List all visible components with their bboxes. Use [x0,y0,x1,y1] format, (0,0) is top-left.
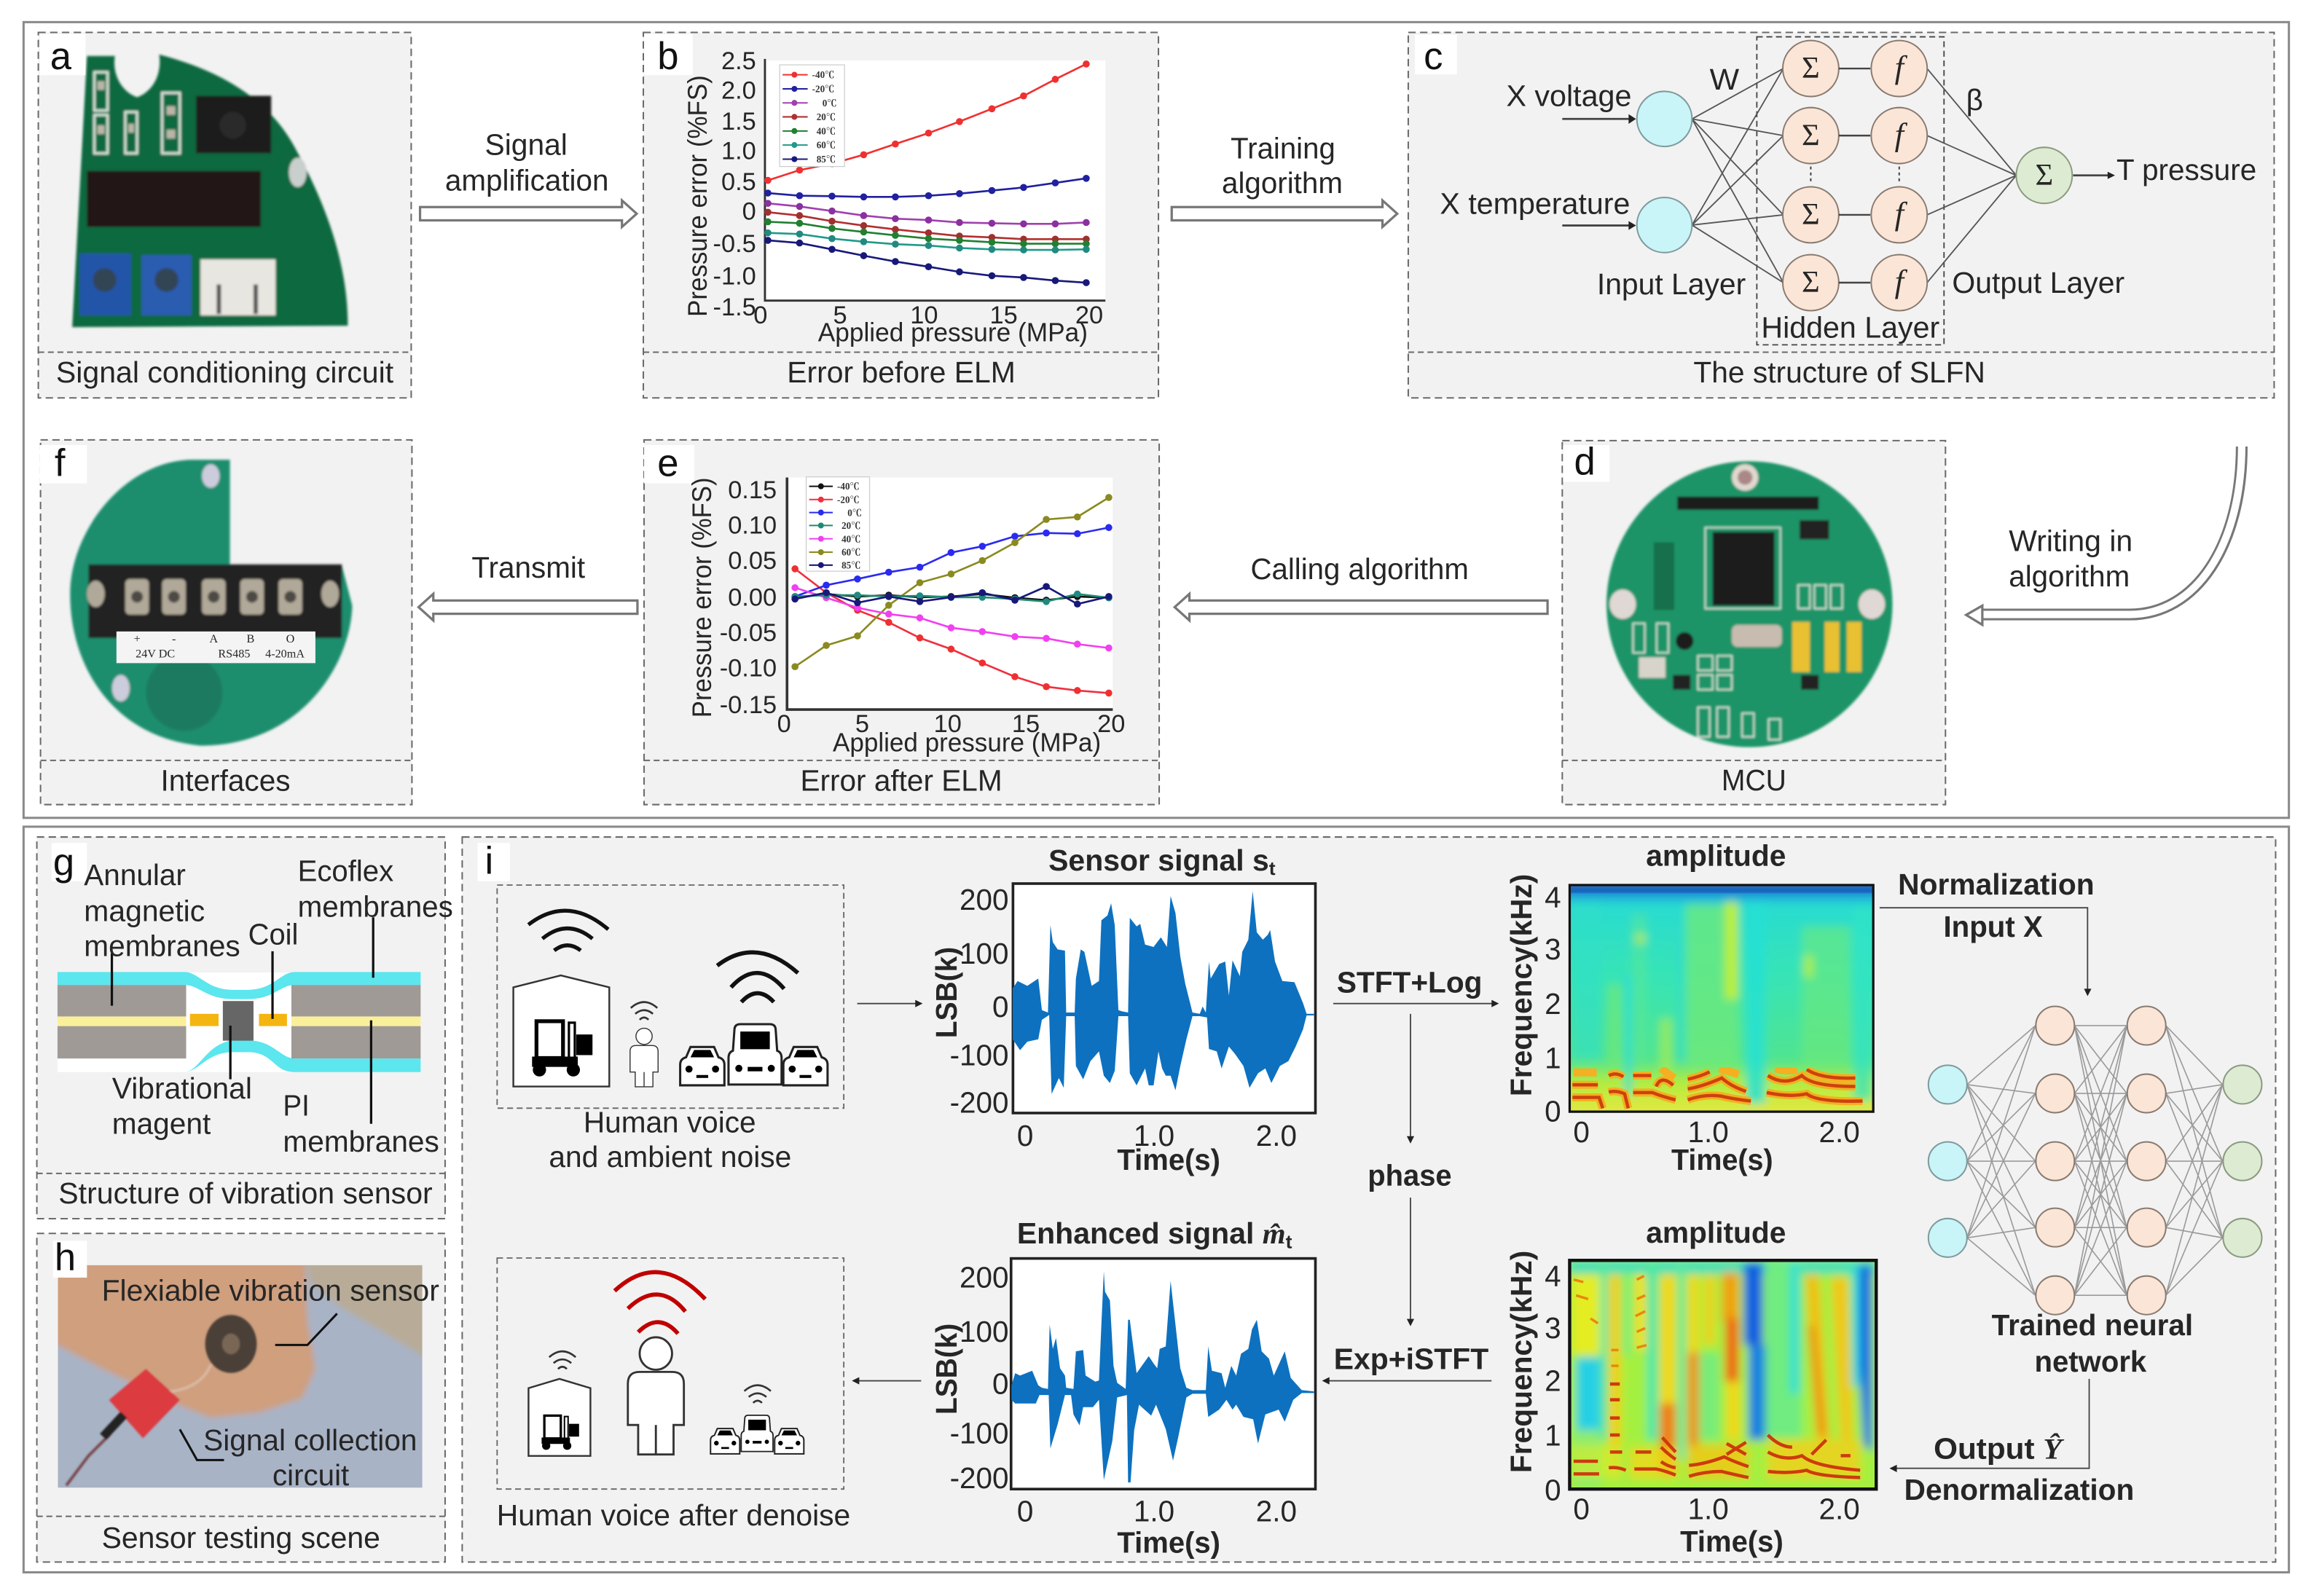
enhanced spectrogram labels: 2 [1545,1364,1561,1398]
arrow a to b: Signal [485,127,568,161]
arrow: denormalization output: Output Ŷ [1934,1431,2065,1465]
panel g: structure of vibration sensor [37,837,453,1219]
legend b: 60℃ [817,140,836,151]
denoised scene box [497,1258,844,1489]
axis labels e: 0.00 [728,583,777,611]
bottom frame [23,827,2289,1573]
arrow b to c [1172,132,1397,227]
icon: warehouse with forklift [514,975,609,1087]
enhanced spectrogram labels [1545,1259,1860,1525]
arrow b to c: algorithm [1222,166,1343,200]
line chart e [686,476,1125,758]
panel f: interfaces [40,440,412,805]
enhanced waveform axis labels: 200 [960,1261,1009,1294]
interface label [117,632,315,663]
hidden nodes: f [1895,195,1908,232]
network input nodes [1929,1065,1967,1257]
waveform envelope [1013,891,1314,1094]
waveform axis labels: 100 [960,937,1009,970]
arrow d to e [1174,552,1547,621]
diagram labels: Annular [84,858,186,892]
axis labels e: -0.05 [720,619,777,647]
diagram labels: PI [283,1088,310,1122]
arrow: normalization input: Input X [1943,910,2043,943]
enhanced spectrogram labels: 1.0 [1688,1492,1729,1525]
spectrogram: input amplitude: amplitude [1646,839,1786,873]
panel a: signal conditioning circuit [39,33,411,398]
caption a: Signal conditioning circuit [56,355,393,389]
axis labels b: -1.5 [713,294,756,321]
caption: noisy scene: and ambient noise [549,1140,791,1174]
curved arrow c to d: algorithm [2009,559,2130,593]
interface label: - [172,633,176,645]
icon: small warehouse [528,1351,590,1456]
curved arrow c to d: Writing in [2009,524,2133,558]
line chart e: 15 [1012,710,1040,738]
panel c: the structure of SLFN [1408,33,2274,398]
letter d: d [1574,440,1596,483]
letter g: g [53,841,74,884]
SLFN labels [1440,63,2256,344]
caption g: Structure of vibration sensor [58,1176,433,1210]
caption h: Sensor testing scene [102,1521,380,1554]
waveform axis labels: -100 [950,1039,1009,1072]
photo labels [102,1273,439,1492]
diagram labels: magent [112,1106,211,1140]
axis labels b: -1.0 [713,262,756,290]
enhanced waveform axis labels: 100 [960,1315,1009,1348]
legend e: 20℃ [841,520,860,531]
axis labels b: 0.5 [721,168,756,196]
spectrogram labels: 0 [1545,1094,1561,1128]
axis labels b: 1.0 [721,137,756,165]
waveform chart: sensor signal: Time(s) [1117,1143,1220,1176]
SLFN labels: X voltage [1506,79,1631,113]
interface label: A [209,633,218,645]
spectrogram image [1571,886,1872,1110]
interface label: B [247,633,254,645]
waveform chart: enhanced signal [930,1216,1315,1560]
icon: car sound waves [717,952,798,1002]
line chart b: Applied pressure (MPa) [818,318,1088,347]
speech harmonics glow [1572,1069,1863,1109]
caption: noisy scene [549,1106,791,1174]
waveform chart: sensor signal [930,844,1315,1176]
arrow: STFT+Log: STFT+Log [1337,965,1482,999]
waveform chart: enhanced signal: LSB(k) [930,1324,963,1415]
panel d: MCU [1562,440,1945,805]
hidden layer box [1757,37,1944,345]
interface label: O [286,633,295,645]
legend b: 20℃ [817,111,836,122]
noisy scene box [497,885,844,1108]
sensor cross-section diagram [58,917,420,1124]
arrow: scene to sensor signal [858,1000,922,1007]
legend b [780,65,844,167]
waveform axis labels: 200 [960,883,1009,916]
axis labels b: 2.0 [721,77,756,105]
arrow heads [1628,114,2115,230]
axis labels e [720,476,777,719]
icon: small cars [710,1385,804,1454]
SLFN labels: Hidden Layer [1761,310,1939,344]
spectrogram labels [1545,881,1860,1149]
letter a [40,34,85,78]
waveform chart: sensor signal: 0 [1017,1119,1033,1152]
top frame [23,22,2289,818]
waveform chart: enhanced signal: 0 [1017,1495,1033,1528]
hidden nodes: Σ [1802,197,1820,232]
legend e: 85℃ [841,559,860,570]
axis labels b [713,47,756,321]
letter g [52,841,87,884]
neural network [1929,1006,2261,1378]
output node [2016,147,2072,203]
line chart b: 0 [753,302,767,329]
letter b: b [657,35,678,78]
photo: conditioning circuit board [72,55,348,327]
waveform chart: enhanced signal: Time(s) [1117,1526,1220,1560]
axis labels e: 0.05 [728,547,777,575]
waveform chart: enhanced signal: Enhanced signal m̂ [1017,1216,1285,1250]
line chart b: Pressure error (%FS) [682,75,713,317]
waveform axis labels: -200 [950,1085,1009,1119]
interface label: + [134,633,141,645]
line chart e: Applied pressure (MPa) [833,728,1101,758]
network hidden nodes [2036,1006,2166,1315]
top dark strip [1569,886,1873,893]
waveform chart: sensor signal: 2.0 [1256,1119,1297,1152]
enhanced spectrogram labels: 4 [1545,1259,1561,1293]
caption c: The structure of SLFN [1693,355,1985,389]
photo: sensor on neck [58,1265,423,1487]
arrow a to b [420,127,637,227]
icon: large person [628,1337,684,1455]
axis labels b: 1.5 [721,108,756,135]
enhanced spectrogram image [1571,1262,1875,1487]
arrow: Exp+iSTFT: Exp+iSTFT [1334,1342,1488,1375]
legend b: -20℃ [812,84,834,95]
photo labels: circuit [272,1458,349,1492]
letter c: c [1424,35,1443,78]
spectrogram: output amplitude: Time(s) [1680,1525,1784,1558]
diagram labels: Vibrational [112,1072,252,1105]
arrow a to b: amplification [445,164,608,197]
spectrogram: input amplitude [1504,839,1896,1176]
photo labels: Flexiable vibration sensor [102,1273,439,1307]
caption d: MCU [1722,763,1786,797]
waveform chart: sensor signal: 1.0 [1134,1119,1174,1152]
caption f: Interfaces [161,764,291,798]
spectrogram labels: 4 [1545,881,1561,914]
spectrogram labels: 1 [1545,1042,1561,1075]
spectrogram labels: 2.0 [1819,1115,1860,1149]
input and output arrows [1562,119,2109,226]
spectrogram: output amplitude [1504,1216,1896,1558]
line chart e: 0 [777,710,791,738]
interface label: RS485 [218,648,250,660]
input nodes [1637,91,1692,253]
hidden nodes: f [1895,263,1908,299]
SLFN labels: W [1710,63,1740,96]
enhanced waveform axis labels [950,1261,1009,1495]
diagram labels: Coil [248,918,298,951]
waveform axis labels: 0 [992,990,1009,1023]
panel e: error after ELM [644,440,1159,805]
legend e: 0℃ [847,507,862,518]
icon: warehouse sound waves [528,911,608,951]
panel i: speech denoising pipeline [462,837,2275,1562]
enhanced waveform axis labels: -200 [950,1461,1009,1495]
letter i [477,840,510,883]
line chart b: 15 [990,302,1018,329]
enhanced harmonics [1574,1276,1860,1477]
arrow: normalization input [1880,868,2095,996]
output node: Σ [2035,158,2053,192]
diagram labels: Ecoflex [298,854,393,888]
axis labels e: 0.10 [728,511,777,539]
caption e: Error after ELM [800,764,1003,798]
letter i: i [485,840,493,883]
legend e [807,477,870,571]
enhanced spectrogram labels: 0 [1545,1473,1561,1506]
letter e [644,441,694,484]
waveform chart: sensor signal: LSB(k) [930,947,963,1038]
letter d [1563,440,1609,483]
waveform chart: enhanced signal: t [1286,1230,1292,1252]
line chart e: 10 [934,710,962,738]
spectrogram: output amplitude: Frequency(kHz) [1504,1251,1538,1473]
hidden nodes: Σ [1802,265,1820,299]
SLFN connections [1692,68,2016,283]
icon: red sound waves [615,1272,705,1334]
SLFN labels: X temperature [1440,186,1630,220]
photo: MCU board [1606,461,1892,747]
axis labels b: 2.5 [721,47,756,75]
SLFN labels: Output Layer [1952,266,2124,299]
waveform axis labels [950,883,1009,1119]
legend b: 40℃ [817,126,836,137]
photo labels: Signal collection [203,1423,417,1457]
hidden nodes [1783,41,1927,310]
spectrogram: input amplitude: Time(s) [1671,1143,1773,1176]
spectrogram labels: 1.0 [1688,1115,1729,1149]
waveform chart: sensor signal: t [1269,857,1276,879]
legend b: 85℃ [817,154,836,165]
hidden nodes: f [1895,49,1908,85]
icon: person [630,1002,658,1087]
caption b: Error before ELM [787,355,1016,389]
arrow: phase link: phase [1368,1158,1452,1192]
legend b: 0℃ [823,98,836,109]
letter h: h [55,1236,76,1279]
hidden nodes: Σ [1802,51,1820,85]
diagram labels: magnetic [84,894,205,927]
axis labels e: -0.15 [720,691,777,719]
legend b: -40℃ [812,69,834,80]
letter a: a [50,35,72,78]
SLFN labels: T pressure [2116,153,2256,186]
hidden nodes: f [1895,116,1908,152]
axis labels e: -0.10 [720,655,777,683]
diagram labels: membranes [283,1125,439,1158]
photo: interface board [70,460,352,746]
arrow b to c: Training [1231,132,1335,165]
SLFN labels: β [1966,83,1983,117]
panel h: sensor testing scene [37,1233,445,1562]
line chart e: 20 [1097,710,1125,738]
enhanced spectrogram labels: 0 [1573,1492,1590,1525]
arrow: phase link [1368,1014,1452,1326]
arrow d to e: Calling algorithm [1250,552,1469,586]
letter h [53,1236,87,1279]
waveform chart: enhanced signal: 2.0 [1256,1495,1297,1528]
arrow: normalization input: Normalization [1898,868,2095,901]
network output nodes [2223,1065,2261,1257]
legend e: -40℃ [837,481,860,492]
axis labels b: -0.5 [713,230,756,258]
legend e: 60℃ [841,547,860,558]
spectrogram: input amplitude: Frequency(kHz) [1504,874,1538,1096]
letter e: e [657,441,678,484]
line chart b: 5 [833,302,847,329]
line chart b: 10 [910,302,938,329]
waveform chart: enhanced signal: 1.0 [1134,1495,1174,1528]
caption: noisy scene: Human voice [584,1106,756,1139]
axis labels e: 0.15 [728,476,777,504]
spectrogram labels: 2 [1545,987,1561,1021]
arrow: denormalization output: Denormalization [1904,1473,2134,1506]
interface label: 4-20mA [265,648,305,660]
arrow e to f [419,551,637,621]
legend e: 40℃ [841,533,860,544]
waveform chart: sensor signal: Sensor signal s [1048,844,1266,877]
legend e: -20℃ [837,494,860,505]
letter f [40,441,87,484]
arrow e to f: Transmit [471,551,585,584]
caption: denoised scene: Human voice after denoise [497,1498,850,1532]
letter b [644,34,693,78]
line chart b [682,47,1105,347]
letter c [1415,35,1457,78]
line chart b: 20 [1075,302,1103,329]
enhanced spectrogram labels: 3 [1545,1311,1561,1345]
network connections [1967,1026,2223,1295]
enhanced waveform axis labels: 0 [992,1367,1009,1401]
spectrogram labels: 3 [1545,932,1561,966]
panel b: error before ELM [643,33,1158,398]
network label: network [2034,1345,2147,1378]
spectrogram: output amplitude: amplitude [1646,1216,1786,1249]
SLFN labels: Input Layer [1597,267,1746,301]
arrow: enhanced signal to scene [852,1377,921,1385]
diagram labels: membranes [298,889,453,923]
curved arrow c to d [1966,445,2242,625]
enhanced spectrogram labels: 1 [1545,1419,1561,1452]
arrow: denormalization output [1889,1379,2134,1506]
spectrogram labels: 0 [1573,1115,1590,1149]
letter f: f [55,441,66,484]
diagram labels [84,854,453,1158]
enhanced waveform axis labels: -100 [950,1416,1009,1450]
enhanced waveform envelope [1011,1271,1314,1482]
line chart e: Pressure error (%FS) [686,477,717,718]
network label: Trained neural [1992,1308,2193,1342]
speech harmonics [1572,1069,1863,1109]
icon: cars [680,1024,828,1085]
diagram labels: membranes [84,929,240,963]
enhanced spectrogram labels: 2.0 [1819,1492,1860,1525]
axis labels b: 0 [742,197,756,225]
interface label: 24V DC [136,648,175,660]
hidden nodes: Σ [1802,118,1820,152]
network label [1992,1308,2193,1378]
line chart e: 5 [855,710,869,738]
